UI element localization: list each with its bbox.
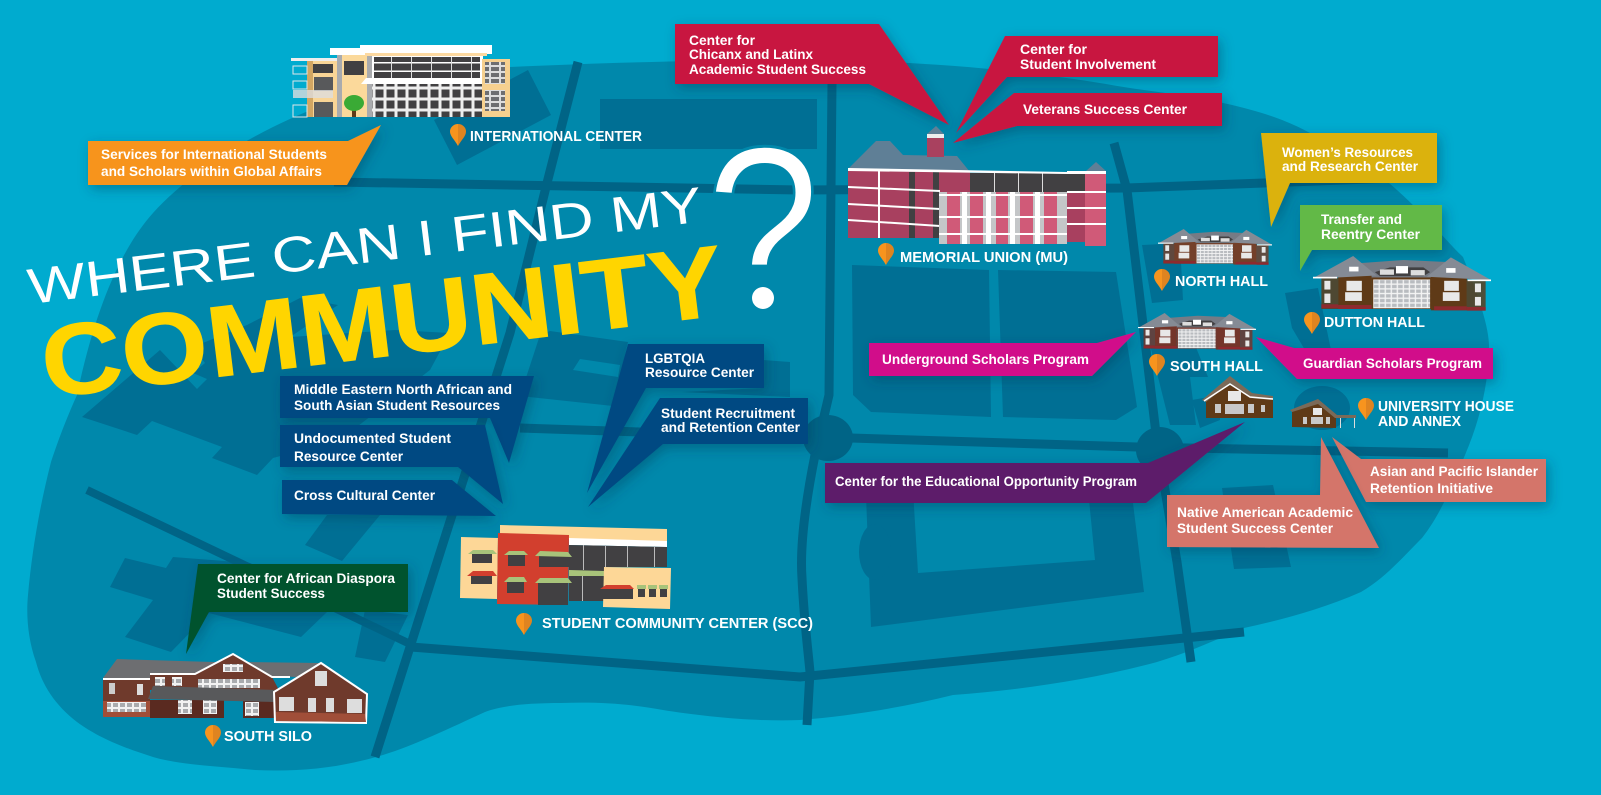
callout: native american: Native American Academic — [1177, 505, 1353, 520]
callout: asian and pacific islander: Asian and Pacific Islander — [1370, 464, 1539, 479]
pin and label: south hall — [1149, 354, 1263, 376]
callout: veterans success center — [953, 93, 1222, 143]
callout: chicanx and latinx: Academic Student Success — [689, 62, 866, 77]
pin and label: university house and annex — [1358, 398, 1514, 430]
callout: native american: Student Success Center — [1177, 521, 1334, 536]
question mark — [713, 144, 814, 309]
pin and label: student community center: STUDENT COMMUNITY CENTER (SCC) — [542, 616, 813, 632]
callout: asian and pacific islander: Retention Initiative — [1370, 481, 1493, 496]
callout: veterans success center: Veterans Success Center — [1023, 102, 1188, 117]
callout: lgbtqia: Resource Center — [645, 365, 755, 380]
callout: student recruitment: and Retention Center — [661, 420, 801, 435]
pin and label: dutton hall: DUTTON HALL — [1324, 315, 1425, 331]
callout: undocumented student: Undocumented Student — [294, 431, 452, 446]
callout: chicanx and latinx — [675, 24, 949, 125]
callout: guardian scholars: Guardian Scholars Program — [1303, 356, 1482, 371]
callout: women's resources — [1261, 133, 1437, 227]
callout: underground scholars: Underground Scholars Program — [882, 352, 1089, 367]
callout: lgbtqia: LGBTQIA — [645, 351, 705, 366]
pin and label: dutton hall — [1304, 312, 1425, 334]
callout: african diaspora: Center for African Diaspora — [217, 571, 395, 586]
callout: transfer and reentry: Transfer and — [1321, 212, 1402, 227]
map blocks — [82, 70, 1350, 662]
callout: african diaspora — [186, 564, 408, 654]
pin and label: south hall: SOUTH HALL — [1170, 359, 1263, 375]
pin and label: north hall — [1154, 269, 1268, 291]
callout: undocumented student: Resource Center — [294, 449, 404, 464]
callout: middle eastern north african: Middle Eastern North African and — [294, 382, 512, 397]
building: dutton hall — [1313, 256, 1491, 311]
callout: african diaspora: Student Success — [217, 586, 325, 601]
pin and label: international center — [450, 124, 642, 146]
building: south silo — [103, 654, 367, 723]
pin and label: university house and annex: AND ANNEX — [1378, 414, 1461, 430]
callout: chicanx and latinx: Center for — [689, 33, 756, 48]
callout: services for international students: and Scholars within Global Affairs — [101, 164, 322, 179]
pin and label: memorial union — [878, 243, 1068, 266]
callout: native american — [1167, 437, 1379, 548]
callout: women's resources: and Research Center — [1282, 159, 1419, 174]
building: international center — [291, 45, 510, 117]
callout: student recruitment: Student Recruitment — [661, 406, 796, 421]
callout: women's resources: Women’s Resources — [1282, 145, 1413, 160]
callout: services for international students — [88, 125, 381, 185]
building: north hall — [1158, 229, 1272, 265]
callout: educational opportunity program: Center for the Educational Opportunity Program — [835, 474, 1137, 489]
callout: services for international students: Services for International Students — [101, 147, 327, 162]
callout: lgbtqia — [587, 344, 764, 493]
building: south hall — [1138, 313, 1256, 350]
title: community: COMMUNITY — [35, 225, 730, 420]
pin and label: international center: INTERNATIONAL CENTER — [470, 129, 642, 145]
callout: student involvement: Center for — [1020, 42, 1088, 57]
title: where can i find my: WHERE CAN I FIND MY — [25, 177, 705, 315]
pin and label: student community center — [516, 613, 813, 635]
pin and label: memorial union: MEMORIAL UNION (MU) — [900, 250, 1068, 266]
callout: transfer and reentry: Reentry Center — [1321, 227, 1421, 242]
callout: chicanx and latinx: Chicanx and Latinx — [689, 47, 813, 62]
building: student community center — [460, 525, 671, 609]
callout: transfer and reentry — [1300, 205, 1442, 271]
building: memorial union — [848, 126, 1106, 246]
callout: middle eastern north african: South Asian Student Resources — [294, 398, 500, 413]
building: university annex — [1290, 399, 1356, 428]
callout: student involvement: Student Involvement — [1020, 57, 1157, 72]
pin and label: north hall: NORTH HALL — [1175, 274, 1268, 290]
pin and label: south silo — [205, 725, 312, 747]
pin and label: university house and annex: UNIVERSITY HOUSE — [1378, 399, 1514, 415]
map streets — [87, 62, 1448, 757]
callout: middle eastern north african — [280, 376, 534, 463]
question mark: ? — [706, 99, 820, 359]
callout: cross cultural center — [282, 480, 496, 516]
callout: educational opportunity program — [825, 422, 1245, 503]
callout: asian and pacific islander — [1332, 437, 1546, 502]
callout: guardian scholars — [1256, 337, 1493, 379]
callout: undocumented student — [280, 425, 503, 504]
callout: student recruitment — [588, 398, 808, 507]
callout: cross cultural center: Cross Cultural Center — [294, 488, 436, 503]
callout: student involvement — [956, 36, 1218, 133]
building: university house — [1202, 376, 1273, 418]
pin and label: south silo: SOUTH SILO — [224, 729, 312, 745]
callout: underground scholars — [869, 332, 1136, 376]
